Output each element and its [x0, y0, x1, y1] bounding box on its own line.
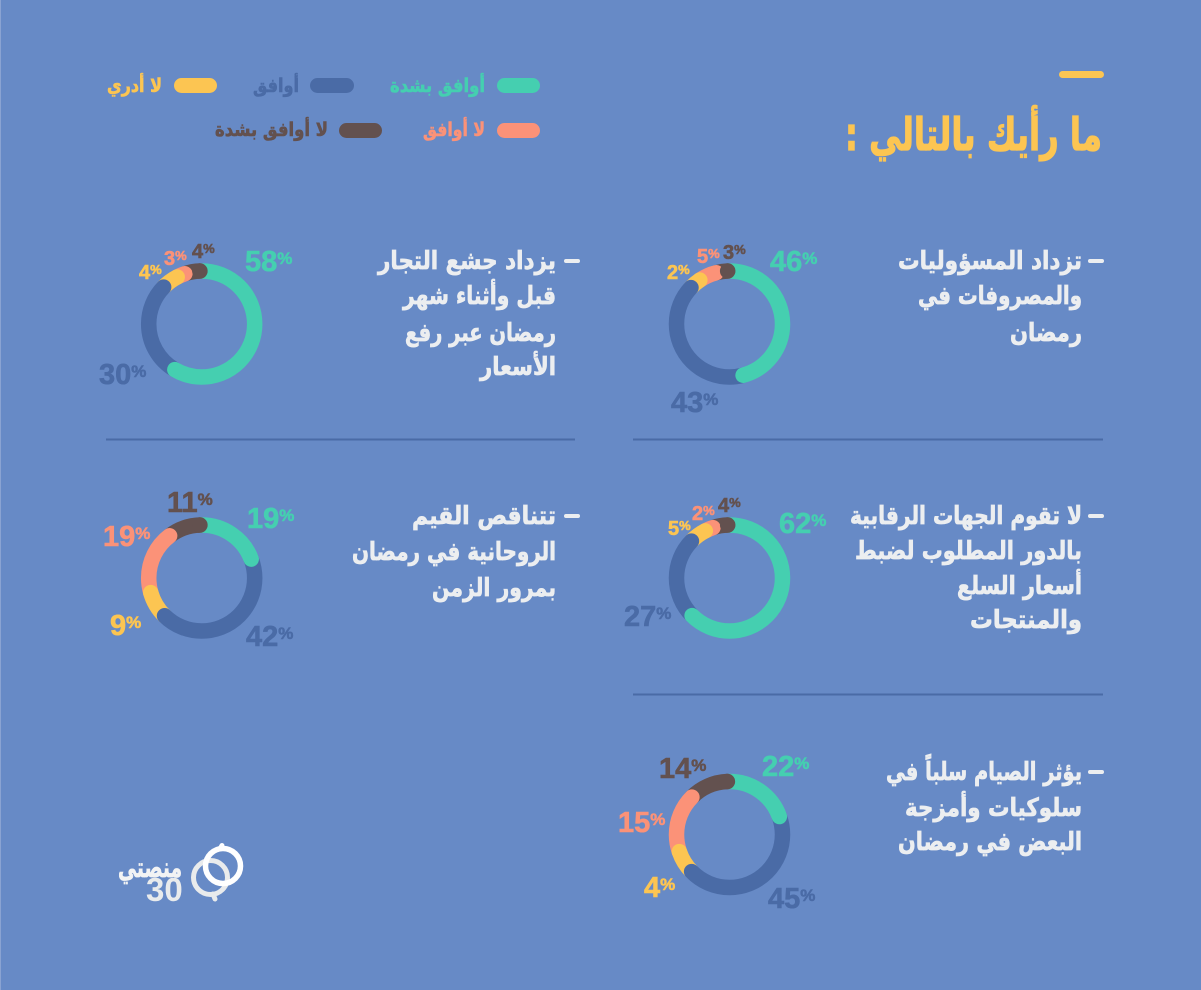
- legend item: strongly disagree: لا أوافق بشدة: [215, 117, 328, 141]
- percentage labels: 3: [723, 242, 734, 264]
- legend item: disagree: لا أوافق: [423, 117, 485, 141]
- percentage labels: 5: [668, 518, 679, 540]
- percentage labels: 14: [659, 753, 691, 785]
- donut chart: [149, 525, 255, 631]
- percentage labels: [667, 242, 817, 419]
- statement text: قبل وأثناء شهر: [401, 279, 556, 311]
- statement text: أسعار السلع: [957, 569, 1082, 601]
- percentage labels: %: [150, 262, 162, 277]
- percentage labels: 4: [192, 241, 203, 263]
- percentage labels: 45: [768, 883, 800, 915]
- statement text: الأسعار: [478, 351, 556, 381]
- percentage labels: 15: [618, 807, 650, 839]
- legend: [107, 73, 540, 141]
- statement text: والمصروفات في: [918, 281, 1082, 311]
- logo icon: speech rings: [194, 846, 240, 899]
- statement text: لا تقوم الجهات الرقابية: [850, 501, 1082, 531]
- statement text: يؤثر الصيام سلباً في: [886, 754, 1082, 787]
- percentage labels: 19: [247, 503, 279, 535]
- percentage labels: %: [660, 875, 675, 894]
- panel: fasting negatively affects behaviour: [618, 751, 1104, 915]
- percentage labels: 62: [779, 508, 811, 540]
- percentage labels: %: [811, 511, 826, 530]
- panel: responsibilities and expenses increase: [667, 242, 1104, 419]
- percentage labels: 43: [671, 387, 703, 419]
- percentage labels: %: [126, 613, 141, 632]
- title: ما رأيك بالتالي :: [845, 105, 1102, 161]
- percentage labels: 3: [164, 248, 175, 270]
- percentage labels: 2: [667, 262, 678, 284]
- percentage labels: %: [679, 518, 691, 533]
- percentage labels: [618, 751, 815, 915]
- title accent bar: [1059, 71, 1104, 78]
- percentage labels: [99, 241, 292, 391]
- percentage labels: 4: [139, 262, 150, 284]
- statement text: الروحانية في رمضان: [352, 537, 556, 567]
- percentage labels: %: [656, 604, 671, 623]
- percentage labels: 9: [110, 610, 126, 642]
- percentage labels: %: [278, 624, 293, 643]
- percentage labels: %: [794, 754, 809, 773]
- statement text: سلوكيات وأمزجة: [905, 791, 1082, 823]
- statement text: يزداد جشع التجار: [376, 246, 556, 276]
- legend item: strongly agree: أوافق بشدة: [390, 73, 485, 97]
- logo: Minassati 30: [118, 846, 240, 908]
- percentage labels: 30: [99, 359, 131, 391]
- percentage labels: [103, 487, 294, 653]
- percentage labels: %: [277, 249, 292, 268]
- statement text: البعض في رمضان: [898, 827, 1082, 856]
- percentage labels: 46: [770, 246, 802, 278]
- percentage labels: 5: [697, 246, 708, 268]
- percentage labels: 11: [167, 487, 198, 519]
- statement text: [352, 501, 580, 603]
- legend item: agree: [253, 73, 354, 97]
- percentage labels: %: [135, 524, 150, 543]
- logo wordmark: منصتي: [118, 851, 182, 884]
- legend item: strongly agree: [390, 73, 540, 97]
- legend item: disagree: [423, 117, 540, 141]
- panel: merchants' greed increases: [99, 241, 580, 391]
- percentage labels: %: [691, 756, 706, 775]
- percentage labels: 4: [644, 872, 660, 904]
- donut chart: [676, 782, 782, 888]
- statement text: [376, 246, 580, 381]
- percentage labels: %: [703, 503, 715, 518]
- percentage labels: 4: [718, 495, 729, 517]
- percentage labels: %: [203, 241, 215, 256]
- statement text: [886, 754, 1104, 856]
- percentage labels: %: [708, 246, 720, 261]
- statement text: رمضان عبر رفع: [405, 318, 556, 348]
- statement text: والمنتجات: [970, 605, 1082, 635]
- percentage labels: [624, 495, 826, 633]
- percentage labels: %: [729, 495, 741, 510]
- legend item: don't know: لا أدري: [107, 73, 162, 98]
- percentage labels: 2: [692, 503, 703, 525]
- percentage labels: 22: [762, 751, 794, 783]
- percentage labels: 42: [246, 621, 278, 653]
- percentage labels: 19: [103, 521, 135, 553]
- statement text: [850, 501, 1104, 635]
- panel: regulators not doing their role: [624, 495, 1104, 635]
- percentage labels: %: [734, 242, 746, 257]
- statement text: بالدور المطلوب لضبط: [855, 536, 1082, 566]
- statement text: بمرور الزمن: [432, 573, 556, 603]
- statement text: [898, 246, 1104, 347]
- percentage labels: %: [703, 390, 718, 409]
- statement text: رمضان: [1010, 318, 1082, 347]
- donut chart: [676, 271, 782, 377]
- percentage labels: %: [198, 490, 213, 509]
- legend item: don't know: [107, 73, 217, 98]
- statement text: تزداد المسؤوليات: [898, 246, 1082, 276]
- percentage labels: %: [131, 362, 146, 381]
- percentage labels: %: [800, 886, 815, 905]
- panel: spiritual values decline: [103, 487, 580, 653]
- statement text: تتناقص القيم: [412, 501, 556, 530]
- percentage labels: %: [175, 248, 187, 263]
- percentage labels: 58: [245, 246, 277, 278]
- percentage labels: 27: [624, 601, 656, 633]
- percentage labels: %: [650, 810, 665, 829]
- donut chart: [149, 271, 255, 377]
- legend item: agree: أوافق: [253, 73, 299, 97]
- percentage labels: %: [678, 262, 690, 277]
- percentage labels: %: [802, 249, 817, 268]
- percentage labels: %: [279, 506, 294, 525]
- logo number: 30: [146, 871, 183, 908]
- donut chart: [676, 525, 782, 631]
